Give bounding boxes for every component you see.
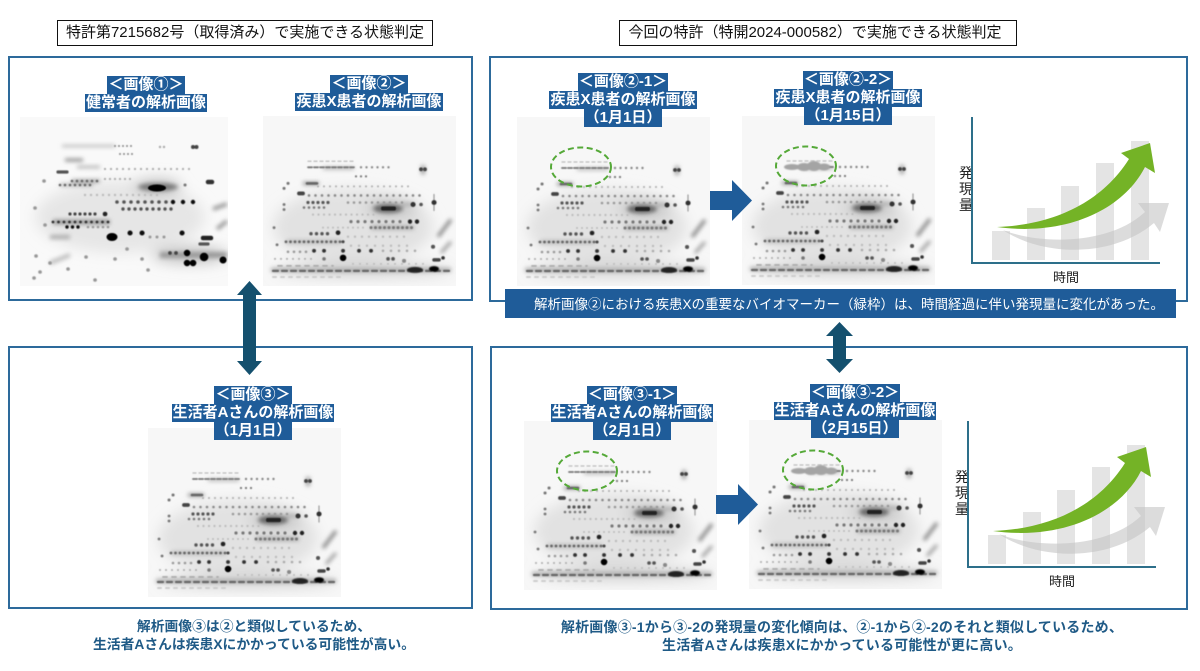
chart plot — [971, 117, 1169, 264]
label: image 3: 生活者Aさんの解析画像 — [173, 404, 333, 421]
label: image 3-1: （2月1日） — [594, 422, 670, 439]
gel image 1 — [28, 141, 228, 283]
label: image 3-2: ＜画像③-2＞ — [811, 384, 899, 401]
gel image 2-1 with green marker — [517, 146, 710, 286]
conclusion: left: 生活者Aさんは疾患Xにかかっている可能性が高い。 — [93, 637, 415, 652]
label: image 2-1 — [549, 73, 697, 127]
label: image 2-1: ＜画像②-1＞ — [579, 73, 667, 90]
label: image 3-2: 生活者Aさんの解析画像 — [775, 402, 935, 419]
arrow: bottom gel progression — [716, 484, 758, 525]
x axis label: time: 時間 — [1053, 270, 1079, 285]
conclusion: right — [561, 619, 1123, 653]
label: image 2-2: ＜画像②-2＞ — [804, 71, 892, 88]
panel: images 3-1 and 3-2 — [490, 346, 1188, 610]
label: image 2-1: 疾患X患者の解析画像 — [550, 91, 696, 108]
callout bar: biomarker finding — [505, 289, 1176, 318]
callout bar: biomarker finding: 解析画像②における疾患Xの重要なバイオマーカー（緑枠）は、時間経過に伴い発現量に変化があった。 — [534, 297, 1164, 312]
chart: top expression over time — [959, 117, 1169, 285]
label: image 2-2: （1月15日） — [805, 107, 891, 124]
gel image 3-2 with green marker — [749, 450, 942, 589]
y axis label: expression amount: 発現量 — [955, 469, 969, 517]
label: image 1: ＜画像①＞ — [108, 76, 184, 93]
chart plot — [967, 421, 1165, 568]
conclusion: right: 解析画像③-1から③-2の発現量の変化傾向は、②-1から②-2のそれと類似しているため、 — [561, 619, 1123, 635]
label: image 3: （1月1日） — [215, 422, 291, 439]
title: current patent: 今回の特許（特開2024-000582）で実施できる状態判定 — [628, 24, 1002, 41]
title: existing patent: 特許第7215682号（取得済み）で実施できる状態判定 — [66, 24, 424, 41]
arrow: right vertical double arrow — [826, 322, 853, 373]
label: image 2 — [295, 75, 443, 111]
arrow: left vertical double arrow — [237, 281, 262, 375]
conclusion: left — [93, 619, 415, 652]
label: image 3: ＜画像③＞ — [215, 386, 290, 403]
gel image 3-1 with green marker — [524, 450, 717, 590]
arrow: top gel progression — [710, 180, 752, 221]
label: image 3-1 — [551, 386, 713, 440]
gel image 2 — [263, 160, 456, 286]
gel image 2-2 with green marker — [742, 146, 935, 285]
label: image 1: 健常者の解析画像 — [86, 94, 206, 111]
conclusion: right: 生活者Aさんは疾患Xにかかっている可能性が更に高い。 — [662, 637, 1022, 653]
chart: bottom expression over time — [955, 421, 1165, 589]
panel: images 2-1 and 2-2 — [489, 56, 1188, 302]
label: image 3 — [172, 386, 334, 440]
label: image 2: 疾患X患者の解析画像 — [296, 93, 442, 110]
conclusion: left: 解析画像③は②と類似しているため、 — [137, 619, 371, 634]
gel image 3 — [148, 471, 341, 597]
title: current patent — [619, 20, 1017, 46]
label: image 2-1: （1月1日） — [585, 109, 661, 126]
label: image 3-2 — [774, 384, 936, 438]
x axis label: time: 時間 — [1049, 574, 1075, 589]
y axis label: expression amount: 発現量 — [959, 165, 973, 213]
label: image 3-1: 生活者Aさんの解析画像 — [552, 404, 712, 421]
label: image 2-2 — [774, 71, 922, 125]
title: existing patent — [57, 20, 433, 46]
label: image 2-2: 疾患X患者の解析画像 — [775, 89, 920, 106]
panel: images 1 and 2 — [8, 56, 473, 301]
label: image 1 — [85, 76, 207, 112]
label: image 3-1: ＜画像③-1＞ — [588, 386, 676, 403]
label: image 2: ＜画像②＞ — [331, 75, 406, 92]
label: image 3-2: （2月15日） — [812, 420, 898, 437]
panel: image 3 — [8, 346, 473, 609]
